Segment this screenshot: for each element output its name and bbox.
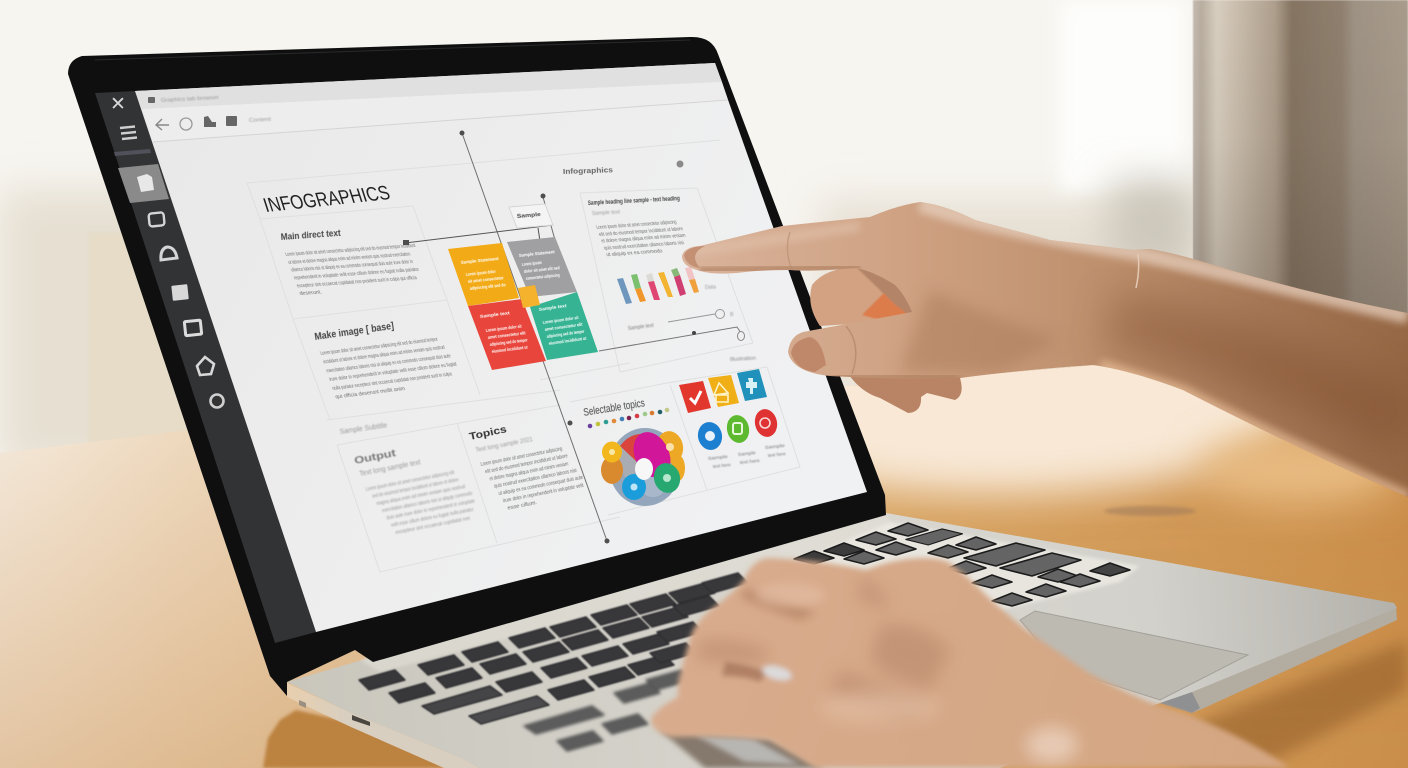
keyboard right bbox=[794, 523, 1130, 606]
text block: right panel: quis nostrud exercitation ullamco laboris nisi bbox=[603, 240, 685, 251]
text block: main text: ut labore et dolore magna aliqua enim ad minim veniam quis nostrud exercitation bbox=[287, 251, 411, 266]
icon: back arrow bbox=[156, 119, 169, 130]
text block: output: exercitation ullamco laboris nisi ut aliquip commodo bbox=[382, 491, 473, 514]
icon: red target bbox=[752, 407, 780, 439]
sidebar divider bbox=[114, 149, 151, 156]
square icons bbox=[679, 369, 767, 413]
icon: blue flower bbox=[695, 420, 725, 452]
browser toolbar bbox=[142, 82, 728, 142]
text block: topics bbox=[468, 423, 587, 515]
sliders bbox=[628, 310, 744, 340]
back of hand soft shadows bbox=[696, 575, 950, 720]
text block: main text: excepteur sint occaecat cupidatat non proident sunt in culpa qui officia bbox=[296, 275, 418, 289]
finger gap near ring bbox=[722, 662, 768, 682]
quadrant: yellow: Lorem ipsum dolor bbox=[466, 269, 496, 277]
label: illustration: Illustration bbox=[730, 356, 756, 363]
curled lower fingers bbox=[847, 365, 962, 413]
screen bbox=[135, 63, 867, 632]
table mark bbox=[1104, 506, 1196, 516]
text block: main text: ullamco laboris nisi ut aliquip ex ea commodo consequat duis aute irure dolor in bbox=[290, 259, 414, 274]
silver strip under palm bbox=[695, 735, 800, 765]
text block: output bbox=[339, 422, 479, 540]
text block: output: sed do eiusmod tempor incididunt ut labore et dolore bbox=[372, 477, 459, 500]
icon: yellow shapes bbox=[708, 375, 739, 407]
icon: red check bbox=[679, 381, 711, 413]
quadrant: yellow bbox=[448, 243, 519, 306]
sliders: Sample text bbox=[628, 323, 655, 332]
index finger light bbox=[690, 226, 860, 252]
front lip bbox=[287, 683, 480, 768]
icon labels bbox=[708, 443, 787, 469]
text block: main image: Lorem ipsum dolor sit amet consectetur adipiscing elit sed do eiusmod tempor bbox=[320, 337, 439, 357]
quadrant: grey: dolor sit amet elit sed bbox=[524, 265, 560, 274]
quadrant: red: amet consectetur elit bbox=[488, 330, 526, 340]
back of hand highlights bbox=[820, 691, 940, 723]
palm shading bbox=[902, 292, 1046, 374]
selected sidebar item bbox=[118, 164, 169, 203]
quadrant badge bbox=[518, 285, 540, 308]
heading: selectable: Selectable topics bbox=[583, 397, 646, 419]
quadrant: red: Lorem ipsum dolor sit bbox=[486, 324, 522, 333]
icon: refresh bbox=[180, 118, 192, 130]
text block: output: Lorem ipsum dolor sit amet consectetur adipiscing elit bbox=[365, 470, 455, 493]
text block: topics: Lorem ipsum dolor sit amet consectetur adipiscing bbox=[480, 446, 563, 468]
browser tab bar: Graphics tab browser bbox=[161, 95, 219, 104]
text block: output: excepteur sint occaecat cupidatat non bbox=[395, 516, 471, 536]
icon: green badge bbox=[724, 413, 752, 445]
index fingernail bbox=[684, 246, 705, 268]
text block: topics: Topics bbox=[468, 423, 508, 443]
laptop lid and bezel bbox=[68, 37, 886, 696]
text block: topics: esse cillum. bbox=[507, 500, 538, 512]
text block: right panel: Sample text bbox=[592, 210, 621, 217]
panel outlines bbox=[247, 140, 800, 572]
middle finger bbox=[810, 267, 915, 326]
quadrant: green bbox=[530, 292, 598, 360]
icon: cloud bbox=[161, 247, 177, 260]
quadrant: green: amet consectetur elit bbox=[544, 322, 583, 332]
browser tab bar bbox=[135, 63, 722, 109]
text block: main image: qui officia deserunt mollit anim bbox=[335, 386, 407, 400]
text block: main text: deserunt. bbox=[299, 290, 323, 297]
icon labels: text here bbox=[713, 462, 732, 469]
text block: main image: nulla pariatur excepteur sint occaecat cupidatat non proident sunt in culpa bbox=[332, 371, 453, 392]
quadrant: yellow: Sample Statement bbox=[461, 256, 499, 265]
icon labels: Sample bbox=[765, 443, 786, 450]
label box: Sample bbox=[517, 212, 541, 220]
text block: main image: Make image [ base] bbox=[314, 320, 395, 343]
pointing hand bbox=[670, 190, 1408, 510]
text block: topics: et dolore magna aliqua enim ad minim veniam bbox=[489, 461, 569, 483]
title: INFOGRAPHICS bbox=[261, 182, 393, 217]
icon: document bbox=[137, 174, 154, 192]
icon: folder bbox=[204, 116, 216, 127]
text block: right panel: elit sed do eiusmod tempor incididunt ut labore bbox=[598, 226, 684, 238]
text block: main image: incididunt ut labore et dolore magna aliqua enim ad minim veniam quis nostrud bbox=[323, 345, 446, 366]
text block: infographics heading: Infographics bbox=[563, 165, 613, 176]
label box bbox=[509, 204, 553, 228]
thumb shadow bbox=[830, 376, 960, 378]
bottom edge highlight bbox=[1100, 366, 1408, 498]
quadrant: red bbox=[468, 299, 546, 370]
text block: topics: elit sed do eiusmod tempor incididunt ut labore bbox=[485, 453, 568, 475]
finger gap bbox=[862, 293, 913, 322]
timeline lines bbox=[405, 133, 741, 541]
bright glare near the laptop bbox=[844, 365, 1291, 522]
text block: right panel bbox=[588, 195, 692, 258]
text block: main image: exercitation ullamco laboris nisi ut aliquip ex ea commodo consequat duis aute bbox=[326, 353, 452, 374]
usb port bbox=[352, 715, 370, 726]
under-finger shadow bbox=[700, 267, 860, 270]
four colour quadrants bbox=[448, 237, 598, 370]
icon labels: text here bbox=[740, 458, 761, 465]
icon: card bbox=[184, 320, 202, 336]
text block: right panel: et dolore magna aliqua enim ad minim veniam bbox=[601, 233, 687, 245]
curtain bbox=[1193, 0, 1408, 345]
hand and arm bbox=[670, 190, 1408, 510]
quadrant: grey: Lorem ipsum bbox=[522, 260, 542, 267]
laptop base bbox=[287, 513, 1397, 768]
text block: output: Sample Subtitle bbox=[339, 422, 388, 436]
icon: camera bbox=[148, 212, 165, 227]
quadrant: yellow: sit amet consectetur bbox=[468, 275, 504, 284]
dark wood near base bbox=[262, 708, 444, 768]
icon: blue puzzle bbox=[737, 369, 767, 401]
wooden table bbox=[0, 365, 1408, 768]
text block: output: duis aute irure dolor in reprehenderit in voluptate bbox=[386, 498, 476, 522]
text block: topics: quis nostrud exercitation ullamco laboris nisi bbox=[494, 468, 577, 490]
text block: topics: Text long sample 2021 bbox=[475, 436, 534, 454]
icon: home bbox=[197, 357, 214, 375]
laptop base shadow bbox=[1180, 640, 1408, 768]
finger shadow top bbox=[742, 588, 816, 620]
quadrant: red: eiusmod incididunt ut bbox=[492, 345, 528, 354]
wrist crease bbox=[1136, 254, 1139, 288]
text block: output: Output bbox=[353, 447, 397, 467]
bar chart bbox=[617, 267, 716, 304]
wood grain bbox=[820, 470, 1408, 768]
circle icons bbox=[695, 407, 780, 452]
ring bbox=[761, 663, 793, 683]
colour dots bbox=[588, 408, 669, 428]
quadrant: yellow: adipiscing elit sed do bbox=[470, 282, 506, 291]
finger crease bbox=[787, 232, 792, 270]
text block: main text: Lorem ipsum dolor sit amet consectetur adipiscing elit sed do eiusmod tempor incididunt bbox=[285, 243, 417, 258]
quadrant: green: eiusmod incididunt ut bbox=[548, 336, 587, 346]
palm shadow bbox=[857, 268, 925, 318]
sidebar bbox=[95, 91, 316, 643]
forearm core shadow bbox=[1110, 320, 1408, 425]
quadrant: green: Sample text bbox=[538, 303, 567, 312]
overlapping circles diagram bbox=[601, 426, 686, 506]
text block: right panel: Lorem ipsum dolor sit amet consectetur adipiscing bbox=[596, 220, 678, 231]
top edge highlight bbox=[920, 204, 1408, 316]
text block: infographics heading bbox=[563, 160, 684, 176]
bar chart: Data bbox=[705, 284, 716, 291]
text block: output: Text long sample text bbox=[359, 459, 421, 478]
text block: main text bbox=[280, 228, 431, 297]
quadrant: red: adipiscing sed do tempor bbox=[490, 337, 528, 347]
quadrant: green: adipiscing sed do tempor bbox=[546, 329, 585, 339]
text block: topics: ut aliquip ex ea commodo consequat duis aute bbox=[498, 475, 584, 497]
icon: circle bbox=[210, 394, 224, 408]
icon labels: text here bbox=[768, 451, 787, 458]
palm shadow on deck bbox=[660, 730, 825, 768]
icon: menu bbox=[120, 126, 137, 139]
text block: main image: irure dolor in reprehenderit in voluptate velit esse cillum dolore eu fugiat bbox=[329, 362, 458, 383]
thumbnail bbox=[791, 337, 826, 372]
text block: main text: Main direct text bbox=[280, 228, 342, 243]
icon: close: ✕ bbox=[110, 94, 126, 115]
icon labels: Sample bbox=[708, 454, 729, 461]
browser toolbar: Content bbox=[249, 117, 272, 124]
text block: main text: reprehenderit in voluptate velit esse cillum dolore eu fugiat nulla pariatur bbox=[293, 267, 420, 281]
text block: main image bbox=[314, 320, 464, 400]
icon: calendar bbox=[171, 284, 189, 301]
text block: output: magna aliqua enim ad minim veniam quis nostrud bbox=[376, 484, 466, 507]
quadrant: grey bbox=[507, 237, 577, 297]
sliders: B bbox=[730, 312, 734, 318]
quadrant: green: Lorem ipsum dolor sit bbox=[542, 315, 579, 325]
text block: right panel: ut aliquip ex ea commodo bbox=[606, 249, 664, 258]
text block: right panel: Sample heading line sample - text heading bbox=[588, 195, 680, 207]
trackpad bbox=[1020, 611, 1248, 700]
icon: grid bbox=[226, 116, 237, 126]
quadrant: red: Sample text bbox=[480, 310, 510, 319]
timeline nodes bbox=[403, 130, 610, 544]
quadrant: grey: consectetur adipiscing bbox=[526, 272, 560, 281]
text block: output: velit esse cillum dolore eu fugiat nulla pariatur bbox=[391, 507, 474, 529]
typing hand bbox=[651, 558, 1290, 768]
keyboard left bbox=[359, 573, 748, 724]
icon labels: Sample bbox=[738, 450, 757, 457]
quadrant: grey: Sample Statement bbox=[519, 249, 555, 258]
text block: topics: irure dolor in reprehenderit in voluptate velit bbox=[503, 483, 585, 504]
deck surface bbox=[287, 513, 1397, 768]
